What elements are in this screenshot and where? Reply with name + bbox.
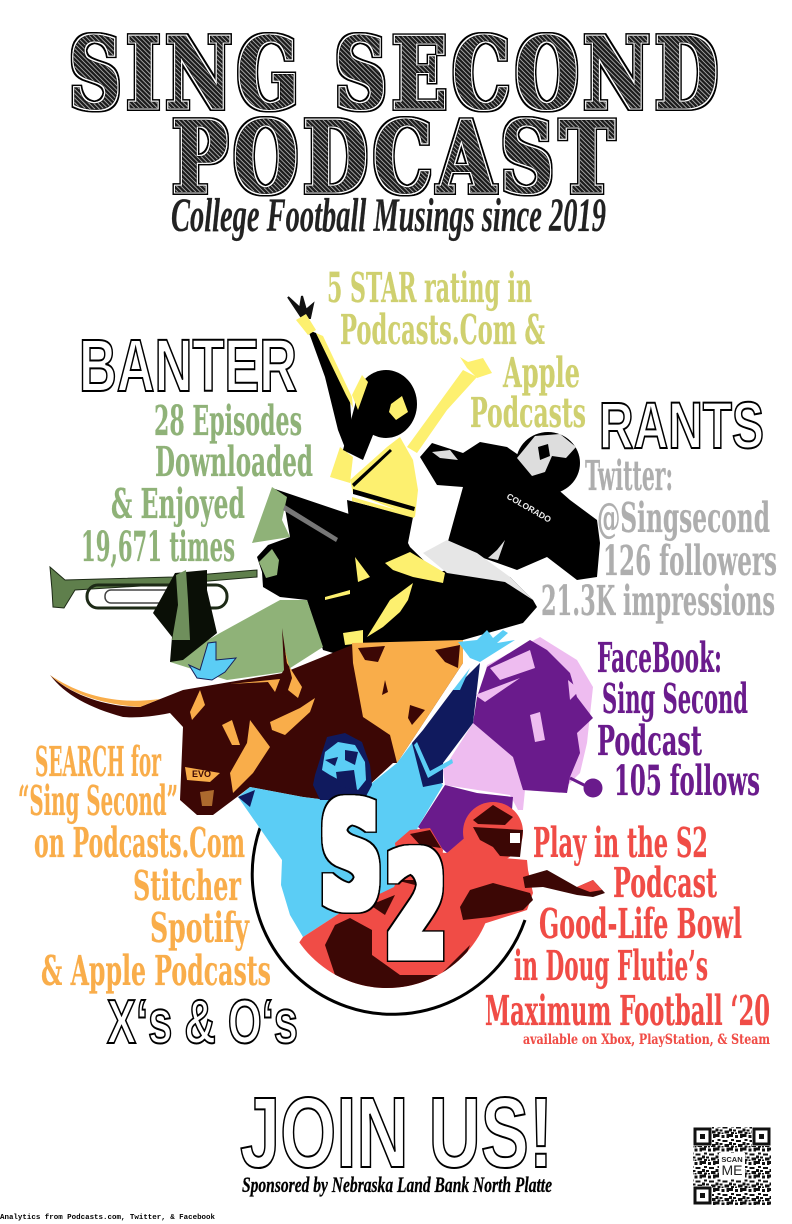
football player silhouette: [340, 432, 600, 650]
navy player: head and arm: [238, 630, 515, 807]
text block: search call to action: Spotify: [150, 904, 250, 952]
S2 logo: S: [321, 773, 381, 940]
QR code: scan me: ME: [722, 1162, 742, 1178]
S2 logo: [321, 773, 446, 990]
colour disc: blue quadrant: [238, 743, 443, 937]
pink and purple coach: [418, 637, 602, 853]
text block: search call to action: “Sing Second”: [18, 777, 178, 825]
title: Sing Second Podcast: PODCAST: [172, 101, 620, 216]
title: Sing Second Podcast: [69, 17, 723, 216]
text block: episodes stat: [81, 397, 313, 571]
colour disc: red quadrant: [299, 838, 486, 988]
heading: X's & O's: X‘s & O‘s: [107, 988, 298, 1057]
text block: search call to action: [18, 738, 271, 995]
S2 logo: 2: [386, 823, 446, 990]
text block: search call to action: on Podcasts.Com: [34, 819, 245, 867]
QR code: scan me: [693, 1127, 771, 1205]
text block: 5 star rating: Podcasts.Com &: [340, 306, 545, 354]
cheerleader: [288, 296, 492, 650]
text block: Facebook stats: Podcast: [597, 717, 702, 765]
illustration: college football collage: [50, 296, 605, 1014]
player background disc and ring: [252, 828, 525, 1014]
text block: 5 star rating: Podcasts: [470, 389, 586, 437]
QR code: scan me: SCAN: [721, 1155, 743, 1164]
dark speckle over red: [325, 880, 470, 988]
text block: Good-Life Bowl: [485, 819, 770, 1048]
text block: episodes stat: 28 Episodes: [154, 397, 302, 445]
blue left hand: [189, 642, 236, 680]
source note: Analytics from Podcasts.com, Twitter, & Facebook: [0, 1214, 215, 1222]
text block: search call to action: Stitcher: [133, 862, 242, 910]
text block: Twitter stats: [541, 452, 777, 625]
red football player: [395, 802, 605, 950]
text block: search call to action: SEARCH for: [35, 738, 162, 786]
longhorn bull: EVO: [192, 769, 211, 779]
text block: episodes stat: & Enjoyed: [111, 480, 245, 528]
text block: episodes stat: Downloaded: [155, 438, 313, 486]
text block: Good-Life Bowl: Podcast: [613, 859, 717, 907]
sponsor line: Sponsored by Nebraska Land Bank North Platte: [242, 1172, 552, 1197]
text block: 5 star rating: [327, 264, 586, 437]
text block: 5 star rating: Apple: [502, 349, 580, 397]
football player silhouette: COLORADO: [505, 491, 553, 525]
text block: Facebook stats: [597, 634, 760, 805]
longhorn bull: [50, 628, 463, 815]
heading: BANTER: BANTER: [79, 324, 297, 407]
text block: 5 star rating: 5 STAR rating in: [327, 264, 532, 312]
band member with trumpet: [50, 487, 352, 680]
text block: search call to action: & Apple Podcasts: [41, 947, 271, 995]
heading: Join Us: JOIN US!: [240, 1077, 553, 1189]
text block: episodes stat: 19,671 times: [81, 523, 235, 571]
text block: Twitter stats: Twitter:: [585, 452, 673, 500]
